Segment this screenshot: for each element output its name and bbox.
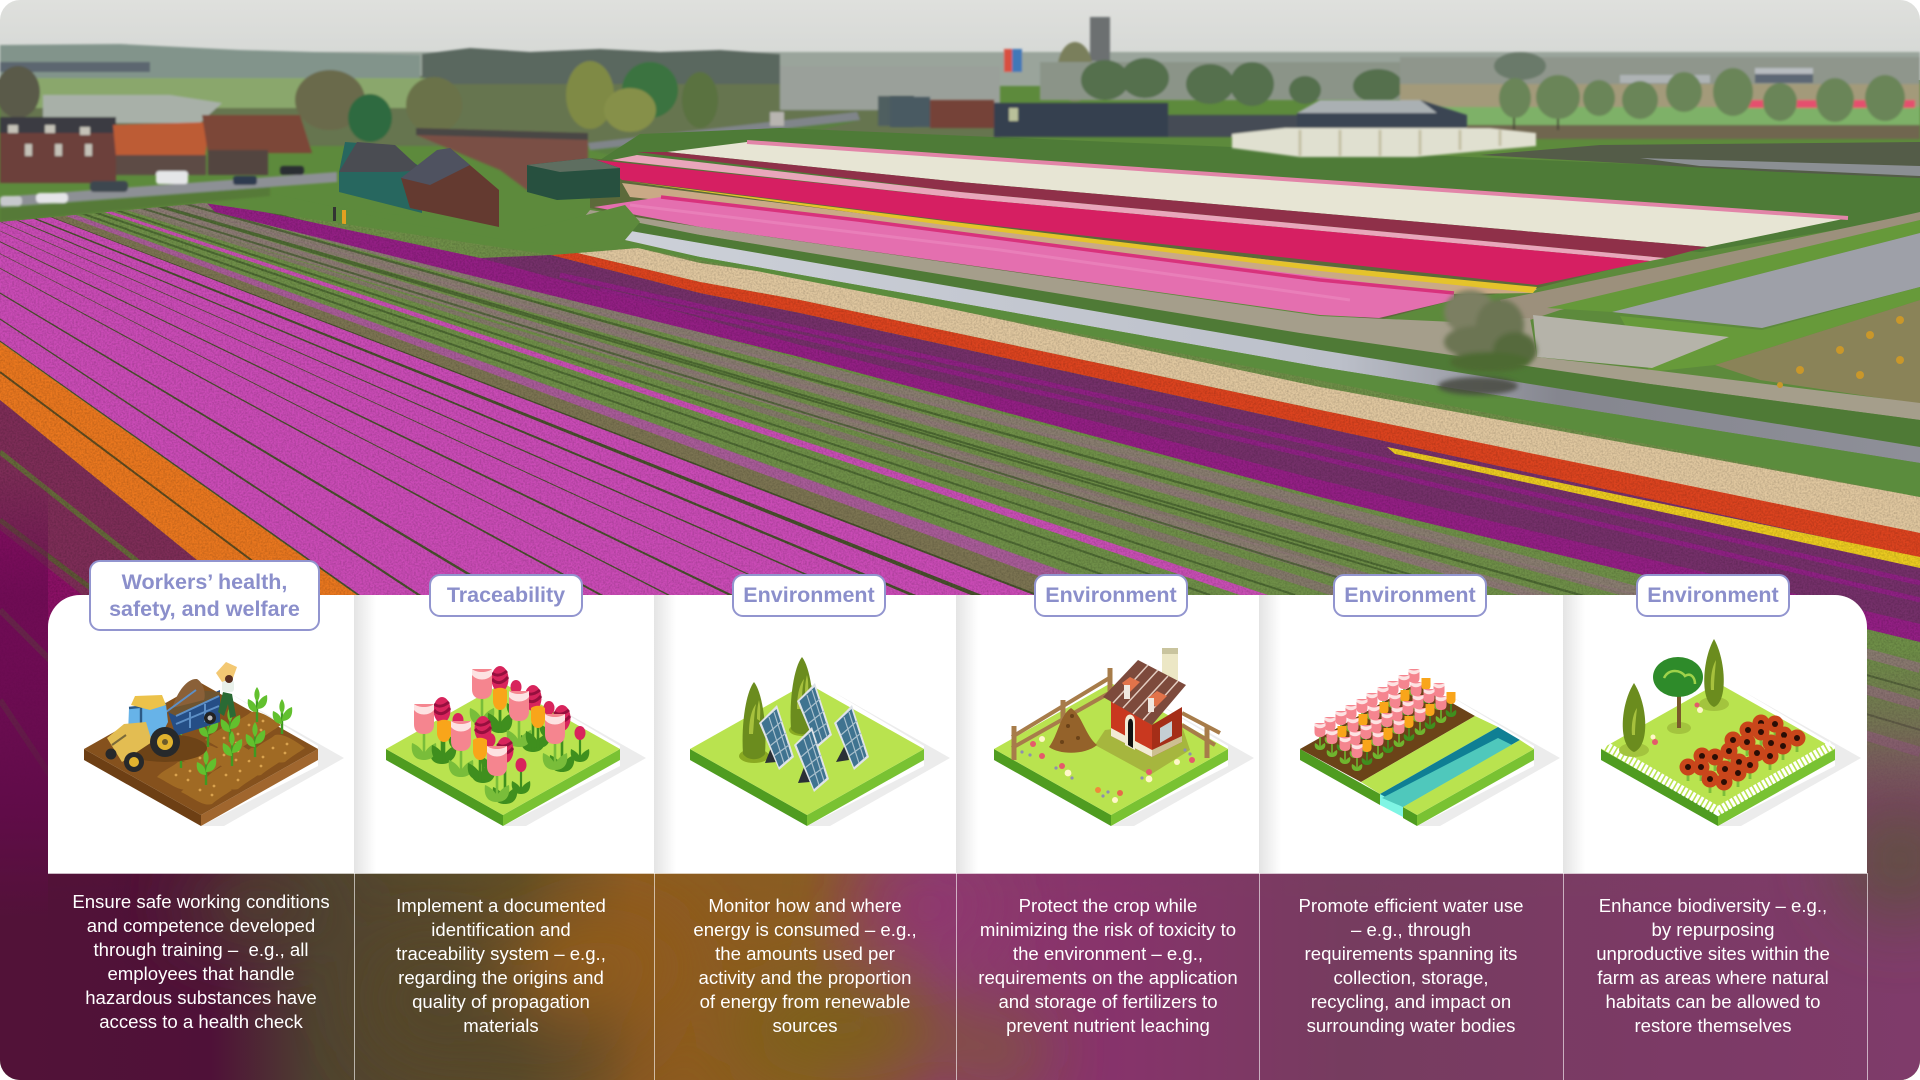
caption text: Implement a documented — [396, 895, 606, 916]
caption text: of energy from renewable — [700, 991, 910, 1012]
caption text: prevent nutrient leaching — [1006, 1015, 1210, 1036]
brick building — [416, 128, 588, 193]
heading pill: Environment — [1344, 583, 1476, 607]
caption text: restore themselves — [1634, 1015, 1792, 1036]
caption text: the amounts used per — [715, 943, 895, 964]
caption text: farm as areas where natural — [1597, 967, 1829, 988]
white panel background — [48, 595, 1867, 873]
caption text — [1299, 895, 1523, 1036]
caption text: recycling, and impact on — [1311, 991, 1511, 1012]
caption text: energy is consumed – e.g., — [693, 919, 917, 940]
caption text: Protect the crop while — [1019, 895, 1197, 916]
column: environment, biodiversity — [1563, 574, 1860, 1080]
distant farm buildings — [890, 97, 1536, 157]
caption text: and storage of fertilizers to — [998, 991, 1218, 1012]
icon: solar panels — [690, 657, 950, 826]
caption text: through training – e.g., all — [94, 939, 308, 960]
icon: tulips beside a water channel — [1300, 669, 1560, 826]
caption text: materials — [463, 1015, 539, 1036]
sky — [0, 0, 1920, 80]
colour wash at the bottom — [0, 671, 1920, 1080]
column: workers' health — [72, 560, 344, 1032]
right edge rule — [1867, 873, 1868, 1080]
heading pill: Environment — [743, 583, 875, 607]
caption text: by repurposing — [1651, 919, 1774, 940]
caption text: the environment – e.g., — [1013, 943, 1203, 964]
caption text: access to a health check — [99, 1011, 303, 1032]
road — [0, 172, 337, 207]
column: traceability — [354, 574, 646, 1080]
dark purple stripes — [480, 255, 1920, 628]
grass patch by the farmhouses — [257, 190, 640, 250]
paths, canal and water — [585, 210, 1920, 505]
column: environment, crop protection — [956, 574, 1254, 1080]
caption text: employees that handle — [107, 963, 295, 984]
caption text: hazardous substances have — [85, 987, 317, 1008]
pink tulip stripes — [0, 217, 1034, 595]
left town — [0, 66, 40, 118]
caption text: unproductive sites within the — [1596, 943, 1830, 964]
icon: tulip plot — [386, 666, 646, 826]
heading pill: Environment — [1647, 583, 1779, 607]
caption text: minimizing the risk of toxicity to — [980, 919, 1236, 940]
heading pill — [1333, 574, 1487, 617]
caption text: requirements spanning its — [1305, 943, 1517, 964]
heading pill — [1636, 574, 1790, 617]
bottom caption rule — [48, 873, 1867, 874]
caption text: sources — [772, 1015, 838, 1036]
caption text: activity and the proportion — [699, 967, 911, 988]
caption text: regarding the origins and — [398, 967, 604, 988]
town and horizon — [0, 17, 1920, 222]
icon: garden with trees and poppies — [1601, 639, 1860, 826]
heading pill: safety, and welfare — [109, 596, 300, 620]
caption text: collection, storage, — [1333, 967, 1489, 988]
caption text: Monitor how and where — [708, 895, 902, 916]
row of trees — [1499, 68, 1905, 130]
heading pill — [732, 574, 886, 617]
caption text: requirements on the application — [978, 967, 1238, 988]
parked cars — [0, 112, 784, 206]
farm buildings — [333, 142, 620, 227]
caption text: Enhance biodiversity – e.g., — [1599, 895, 1827, 916]
heading pill — [429, 574, 583, 617]
heading pill — [89, 560, 320, 631]
caption text — [693, 895, 917, 1036]
caption text: traceability system – e.g., — [396, 943, 606, 964]
caption text: and competence developed — [87, 915, 315, 936]
dark wash on the left edge — [0, 470, 48, 920]
caption text — [1596, 895, 1830, 1036]
column: environment, water — [1259, 574, 1560, 1080]
crimson stripes lower left — [0, 400, 197, 595]
upper field stripes — [590, 128, 1920, 320]
ground base — [0, 70, 1920, 520]
icon: farmhouse with fence and compost heap — [994, 648, 1254, 826]
caption text — [396, 895, 606, 1036]
heading pill — [1034, 574, 1188, 617]
caption text: Promote efficient water use — [1299, 895, 1523, 916]
heading pill: Workers’ health, — [122, 570, 287, 594]
red, cream and yellow stripes — [577, 248, 1920, 534]
heading pill: Environment — [1045, 583, 1177, 607]
caption text: quality of propagation — [412, 991, 590, 1012]
flower texture — [0, 203, 1920, 761]
caption text — [978, 895, 1238, 1036]
caption text: – e.g., through — [1351, 919, 1471, 940]
caption text — [72, 891, 330, 1032]
caption text: identification and — [431, 919, 571, 940]
icon: tractor in a crop plot — [84, 662, 344, 826]
orange tulip stripes — [0, 342, 357, 595]
caption text: surrounding water bodies — [1307, 1015, 1515, 1036]
column: environment, energy — [654, 574, 950, 1080]
heading pill: Traceability — [447, 583, 565, 607]
caption text: Ensure safe working conditions — [72, 891, 330, 912]
caption text: habitats can be allowed to — [1605, 991, 1820, 1012]
